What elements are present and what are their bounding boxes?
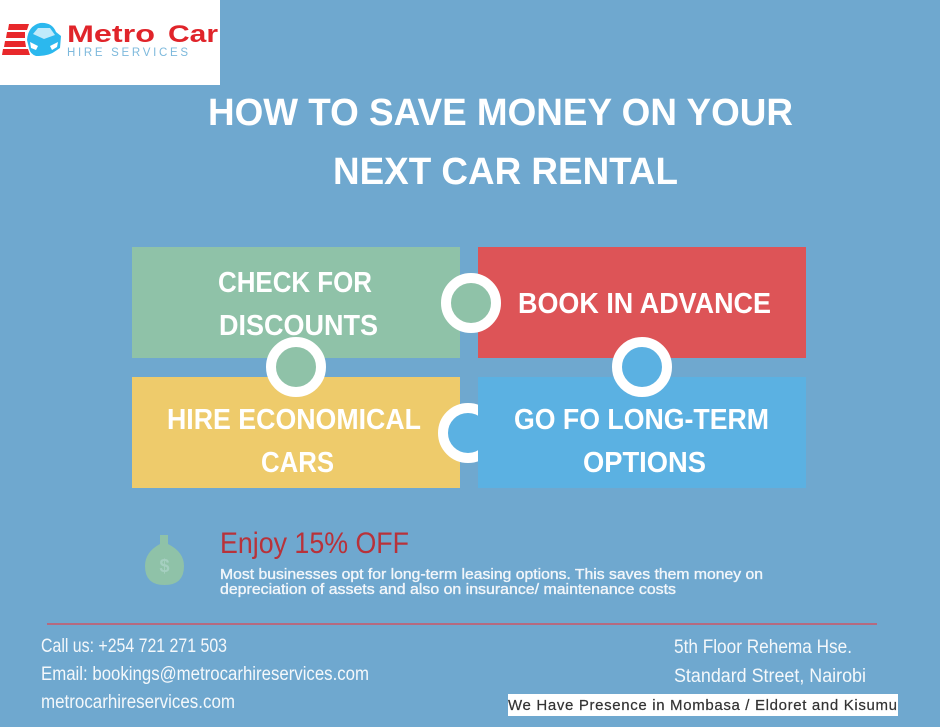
panel: go for long-term options: OPTIONS (583, 447, 706, 479)
icon: money bag: $ (159, 556, 170, 576)
icon: red speed stripes (2, 24, 30, 55)
callout: enjoy 15% off (220, 527, 763, 598)
panel: go for long-term options (478, 377, 806, 488)
address: 5th Floor Rehema Hse. (674, 637, 852, 658)
panel: check for discounts: DISCOUNTS (219, 310, 378, 342)
title: HOW TO SAVE MONEY ON YOUR (208, 92, 793, 134)
title (208, 92, 793, 193)
icon: money bag (145, 535, 184, 585)
panel: hire economical cars (132, 377, 460, 488)
contact details: Email: bookings@metrocarhireservices.com (41, 664, 369, 685)
contact details: Call us: +254 721 271 503 (41, 636, 227, 657)
title: NEXT CAR RENTAL (333, 151, 678, 193)
panel: check for discounts (132, 247, 460, 358)
connector ring: red to blue (617, 342, 667, 392)
logo tagline: HIRE SERVICES (67, 47, 188, 59)
connector ring: green to red (446, 278, 496, 328)
logo wordmark (67, 21, 218, 48)
connector ring: green to yellow (271, 342, 321, 392)
callout body text: depreciation of assets and also on insurance/ maintenance costs (220, 582, 676, 598)
connector ring: yellow to blue (443, 408, 493, 458)
address: Standard Street, Nairobi (674, 666, 866, 687)
panel: hire economical cars: HIRE ECONOMICAL (167, 404, 421, 436)
contact details (41, 636, 369, 713)
callout body text: Most businesses opt for long-term leasing options. This saves them money on (220, 567, 763, 583)
presence banner: We Have Presence in Mombasa / Eldoret and Kisumu (508, 697, 897, 714)
panel: hire economical cars: CARS (261, 447, 334, 479)
panel: go for long-term options: GO FO LONG-TERM (514, 404, 769, 436)
panel: check for discounts: CHECK FOR (218, 267, 372, 299)
contact details: metrocarhireservices.com (41, 692, 235, 713)
logo: Metro Car Hire Services (0, 0, 220, 85)
panel: book in advance (478, 247, 806, 358)
callout body text (220, 567, 763, 598)
panel: book in advance: BOOK IN ADVANCE (518, 288, 771, 320)
callout: enjoy 15% off: Enjoy 15% OFF (220, 527, 409, 560)
logo wordmark: Metro (67, 21, 155, 48)
address (674, 637, 866, 687)
logo wordmark: Car (168, 21, 218, 48)
footer divider (47, 623, 877, 625)
icon: blue car (27, 23, 61, 56)
